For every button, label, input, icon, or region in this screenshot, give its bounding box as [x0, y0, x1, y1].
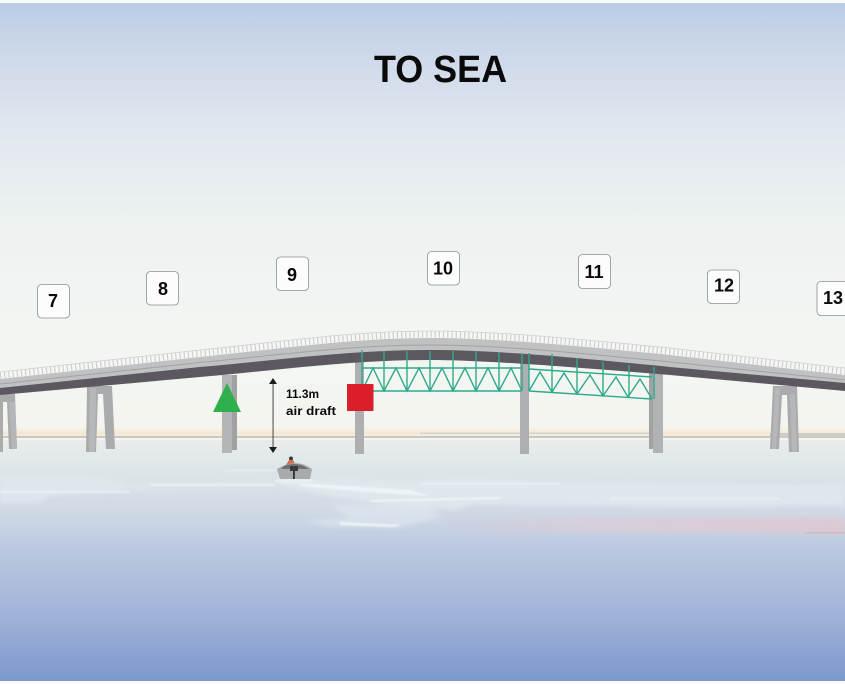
pier 12 [649, 372, 663, 453]
pier 8 [86, 386, 115, 452]
pier 9 [222, 375, 237, 453]
air draft label [286, 389, 336, 418]
title: TO SEA [374, 49, 507, 91]
railing [0, 331, 845, 379]
road edge line [0, 345, 845, 384]
arrow: air draft height [269, 378, 277, 453]
truss: span 10 [362, 350, 522, 391]
pier label 13: 13 [823, 288, 843, 308]
icon: green triangle marker [213, 383, 241, 412]
pier label 8: 8 [158, 279, 168, 299]
pier 11 [520, 360, 529, 454]
pink water reflection [445, 517, 845, 533]
icon: boat [274, 456, 314, 484]
pier label 8 [146, 272, 178, 305]
pier label 11: 11 [584, 262, 604, 282]
pier label 9: 9 [287, 265, 297, 285]
pier 7 [0, 394, 17, 452]
pier label 13 [817, 282, 845, 316]
water background [0, 440, 845, 681]
pier 13 [770, 386, 799, 452]
pier label 12: 12 [714, 276, 734, 296]
air draft label: 11.3m [286, 389, 319, 401]
pier label 10: 10 [433, 258, 453, 278]
piers [0, 360, 799, 454]
pier label 11 [578, 254, 610, 288]
bridge deck [0, 331, 845, 395]
road deck side [0, 337, 845, 388]
pier label 9 [276, 257, 308, 290]
horizon line [0, 427, 845, 438]
deck underside [0, 348, 845, 395]
water ripples [0, 475, 845, 528]
truss: span 11 [529, 353, 654, 399]
air draft label: air draft [286, 406, 336, 418]
pier label 10 [428, 252, 460, 285]
pier label 7 [38, 284, 70, 318]
icon: red square marker [347, 384, 374, 411]
pier 10 [355, 360, 364, 454]
pier label 7: 7 [48, 291, 58, 311]
sky background [0, 3, 845, 443]
pier label 12 [708, 270, 740, 304]
